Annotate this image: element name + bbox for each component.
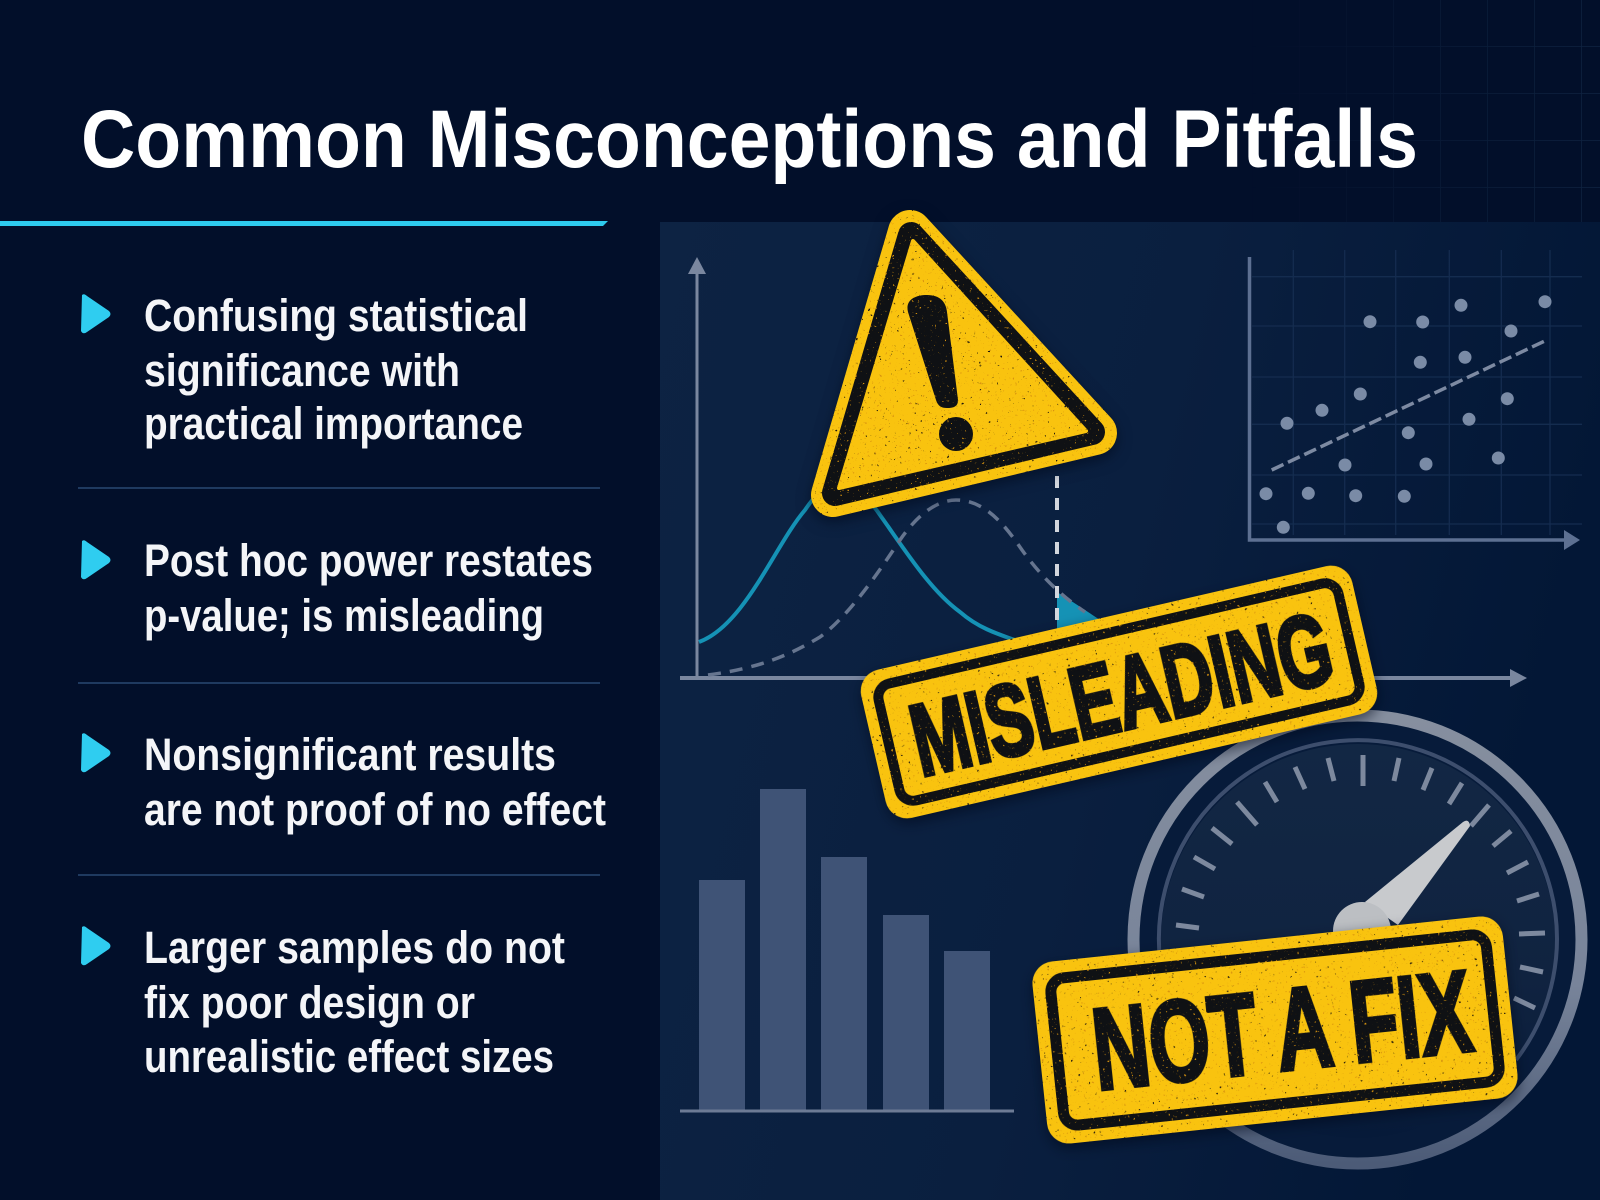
title: Common Misconceptions and Pitfalls [81, 94, 1418, 185]
scatter axes [1250, 257, 1566, 540]
gauge needle [1365, 821, 1470, 925]
icon: speedometer gauge [1134, 716, 1582, 1164]
panel: list of pitfalls [78, 290, 606, 1082]
text: item 3: Nonsignificant results [144, 729, 556, 780]
chart: bar chart [680, 789, 1014, 1111]
text: item 1: practical importance [144, 398, 523, 449]
triangle black band [835, 235, 1092, 493]
item 2: post hoc power [81, 535, 593, 641]
panel: illustration backdrop [660, 222, 1600, 1200]
text: item 2: p-value; is misleading [144, 590, 544, 641]
gauge hub [1333, 902, 1391, 960]
background grid top right [1378, 0, 1600, 222]
triangle yellow centre [839, 241, 1086, 488]
text: item 4: fix poor design or [144, 977, 475, 1028]
shaded tail area [1057, 592, 1100, 635]
item 4: larger samples [81, 922, 565, 1082]
text: item 1: Confusing statistical [144, 290, 528, 341]
sign: MISLEADING: MISLEADING [900, 591, 1343, 798]
x axis with arrow [680, 676, 1512, 680]
text: item 2: Post hoc power restates [144, 535, 593, 586]
chart: overlapping bell curves [680, 257, 1527, 687]
sign: MISLEADING [856, 561, 1382, 823]
icon: bullet arrow 2 [81, 540, 110, 579]
triangle yellow border [833, 232, 1095, 495]
icon: warning triangle sign [833, 232, 1095, 495]
dashed distribution curve [708, 500, 1085, 675]
trend line [1272, 339, 1548, 470]
exclamation stroke [907, 295, 958, 408]
text: item 1: significance with [144, 345, 460, 396]
gauge outer ring [1134, 716, 1582, 1164]
gauge tick marks [1176, 755, 1545, 1008]
item 3: nonsignificant results [81, 729, 606, 835]
icon: bullet arrow 1 [81, 294, 110, 333]
icon: bullet arrow 4 [81, 926, 110, 965]
text: item 4: Larger samples do not [144, 922, 565, 973]
title accent rule [0, 221, 608, 226]
exclamation dot [939, 417, 973, 451]
icon: bullet arrow 3 [81, 733, 110, 772]
sign: NOT A FIX [1030, 914, 1520, 1146]
text: item 4: unrealistic effect sizes [144, 1031, 554, 1082]
solid distribution curve [699, 485, 1040, 648]
y axis with arrow [696, 272, 698, 677]
gauge inner ring arc [1159, 740, 1557, 1060]
item 1: statistical significance [81, 290, 528, 449]
chart: scatter plot with trend line [1250, 250, 1582, 550]
data points [1260, 295, 1552, 534]
text: item 3: are not proof of no effect [144, 784, 606, 835]
dashed threshold line [1055, 476, 1059, 640]
gauge inner dial [1161, 744, 1555, 1138]
